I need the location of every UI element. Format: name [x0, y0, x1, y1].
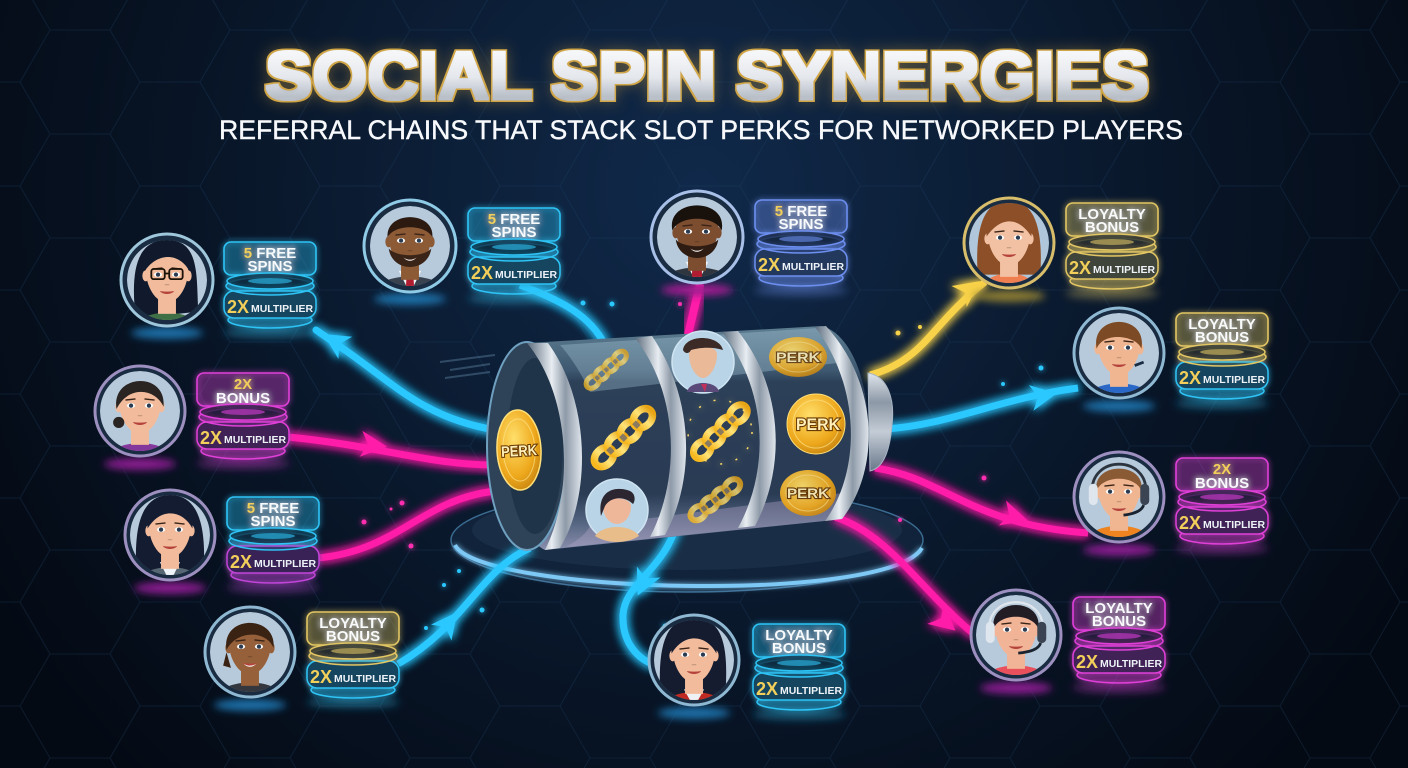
- connector: magenta to avatar 10: [318, 491, 495, 558]
- perk stack 5: 2X: [1179, 368, 1201, 388]
- connector: cyan to avatar 9: [398, 548, 530, 664]
- perk stack 11: BONUS: [216, 390, 270, 407]
- perk stack 8: LOYALTY: [765, 627, 833, 644]
- perk stack 7: MULTIPLIER: [1100, 658, 1162, 670]
- connector: magenta to avatar 3: [688, 284, 700, 335]
- glass highlights: [560, 328, 850, 547]
- avatar 3: curly hair, beard, suit: [651, 191, 743, 296]
- avatar 6: headphones, orange shirt: [1074, 452, 1164, 556]
- perk stack 6: BONUS: [1195, 475, 1249, 492]
- perk stack 7: [1073, 597, 1165, 692]
- perk stack 8: [753, 624, 845, 719]
- coin: lower right: PERK: [787, 485, 829, 501]
- perk stack 1: 5 FREE: [244, 245, 296, 262]
- perk stack 1: [224, 242, 316, 337]
- perk stack 4: BONUS: [1085, 219, 1139, 236]
- perk stack 3: [755, 200, 847, 295]
- coin: left end: [495, 409, 543, 491]
- connector: cyan to avatar 2: [520, 285, 605, 345]
- right stub: [868, 373, 893, 471]
- perk stack 4: 2X: [1069, 258, 1091, 278]
- avatar 5: brown hair, blue shirt, mic: [1074, 308, 1164, 412]
- perk stack 6: MULTIPLIER: [1203, 519, 1265, 531]
- coin: top right: PERK: [776, 349, 820, 365]
- perk stack 6: 2X: [1213, 461, 1231, 478]
- connector: gold to avatar 4: [870, 271, 988, 375]
- perk stack 6: [1176, 458, 1268, 553]
- perk stack 7: LOYALTY: [1085, 600, 1153, 617]
- avatar 10: long hair, grey blazer: [125, 490, 215, 594]
- perk stack 1: SPINS: [247, 258, 293, 275]
- coin: lower right: [780, 470, 836, 516]
- avatar 7: headset, dark hair, coral shirt: [971, 590, 1061, 694]
- perk stack 1: MULTIPLIER: [251, 303, 313, 315]
- perk stack 2: [468, 208, 560, 303]
- perk stack 2: 5 FREE: [488, 211, 540, 228]
- avatar 2: dark skin, beard, suit: [364, 200, 456, 305]
- avatar 4: auburn hair, coral top: [964, 198, 1054, 302]
- perk stack 4: [1066, 203, 1158, 298]
- silver band 2: [635, 336, 686, 537]
- perk stack 9: BONUS: [326, 628, 380, 645]
- perk stack 2: SPINS: [491, 224, 537, 241]
- title: SOCIAL SPIN SYNERGIES: [265, 38, 1149, 114]
- perk stack 10: [227, 497, 319, 592]
- chain symbols: [584, 349, 752, 523]
- perk stack 9: 2X: [310, 667, 332, 687]
- perk stack 9: LOYALTY: [319, 615, 387, 632]
- perk stack 8: 2X: [756, 679, 778, 699]
- perk stack 2: 2X: [471, 263, 493, 283]
- perk stack 10: SPINS: [250, 513, 296, 530]
- perk stack 1: 2X: [227, 297, 249, 317]
- perk stack 3: 2X: [758, 255, 780, 275]
- coin: middle right: [787, 394, 845, 454]
- left cap: [487, 342, 567, 550]
- perk stack 7: BONUS: [1092, 613, 1146, 630]
- coin: left end: PERK: [501, 442, 538, 461]
- perk stack 3: MULTIPLIER: [782, 261, 844, 273]
- connector: magenta to avatar 7: [835, 517, 975, 641]
- perk stack 4: MULTIPLIER: [1093, 264, 1155, 276]
- perk stack 8: MULTIPLIER: [780, 685, 842, 697]
- avatar 1: long hair, glasses, green shirt: [121, 234, 213, 339]
- platform: [451, 488, 923, 592]
- perk stack 5: BONUS: [1195, 329, 1249, 346]
- particles: [362, 300, 1044, 630]
- perk stack 10: 5 FREE: [247, 500, 299, 517]
- perk stack 10: 2X: [230, 552, 252, 572]
- perk stack 11: MULTIPLIER: [224, 434, 286, 446]
- mini avatar: reel top: [672, 331, 734, 393]
- subtitle: REFERRAL CHAINS THAT STACK SLOT PERKS FOR NETWORKED PLAYERS: [219, 115, 1183, 145]
- coin: top right: [769, 337, 827, 377]
- mini avatar: reel bottom: [586, 479, 648, 542]
- perk stack 8: BONUS: [772, 640, 826, 657]
- perk stack 4: LOYALTY: [1078, 206, 1146, 223]
- silver band 3: [722, 331, 776, 528]
- perk stack 7: 2X: [1076, 652, 1098, 672]
- connector: cyan to avatar 5: [885, 381, 1078, 429]
- perk stack 5: LOYALTY: [1188, 316, 1256, 333]
- silver band 1: [527, 343, 582, 550]
- glass body: [509, 326, 868, 550]
- connector: cyan to avatar 8: [623, 510, 680, 665]
- perk stack 5: MULTIPLIER: [1203, 374, 1265, 386]
- coin: middle right: PERK: [796, 415, 841, 434]
- connector: cyan to avatar 1: [316, 323, 495, 430]
- perk stack 11: 2X: [200, 428, 222, 448]
- avatar 9: brown skin, pulled back hair: [205, 607, 295, 711]
- connector: magenta to avatar 6: [875, 468, 1088, 533]
- avatar 11: short dark hair, purple top: [95, 366, 185, 470]
- perk stack 3: 5 FREE: [775, 203, 827, 220]
- perk stack 6: 2X: [1179, 513, 1201, 533]
- perk stack 3: SPINS: [778, 216, 824, 233]
- slot reel cylinder: [487, 326, 893, 550]
- perk stack 11: [197, 373, 289, 468]
- perk stack 5: [1176, 313, 1268, 408]
- silver band 4: [815, 326, 869, 521]
- perk stack 2: MULTIPLIER: [495, 269, 557, 281]
- speed lines: [440, 355, 495, 378]
- perk stack 10: MULTIPLIER: [254, 558, 316, 570]
- avatar 8: long dark hair, red blazer: [649, 615, 739, 719]
- connector: magenta to avatar 11: [288, 431, 495, 465]
- perk stack 9: [307, 612, 399, 707]
- perk stack 9: MULTIPLIER: [334, 673, 396, 685]
- perk stack 11: 2X: [234, 376, 252, 393]
